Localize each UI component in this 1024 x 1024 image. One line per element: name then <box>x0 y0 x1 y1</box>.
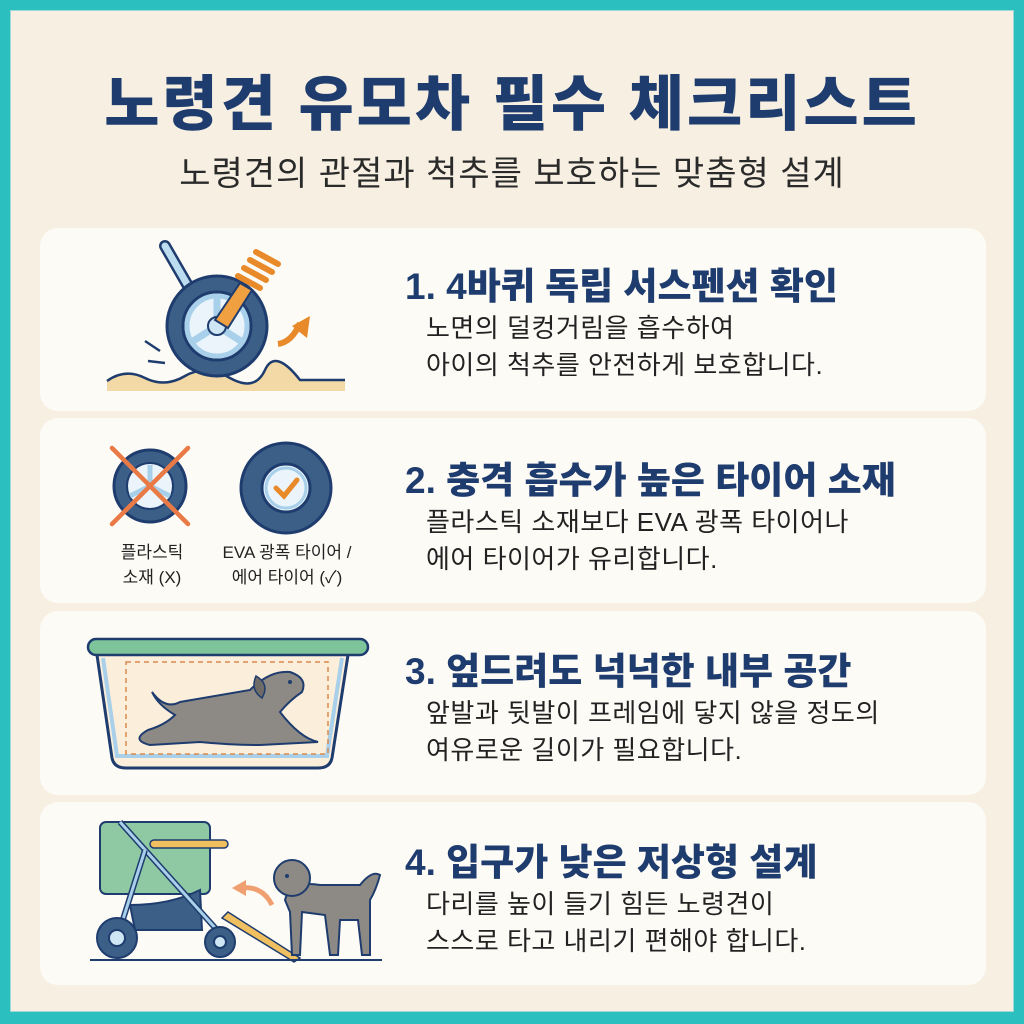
body 4: 스스로 타고 내리기 편해야 합니다. <box>426 926 806 956</box>
icon: EVA tire check <box>240 442 332 534</box>
label plastic <box>121 543 183 587</box>
panel: suspension <box>40 228 986 411</box>
icon: stroller with ramp and dog <box>90 820 382 963</box>
title: 노령견 유모차 필수 체크리스트 <box>104 71 920 138</box>
body 4 <box>426 889 806 956</box>
heading 3: 3. 엎드려도 넉넉한 내부 공간 <box>405 651 851 692</box>
label EVA <box>223 543 352 587</box>
body 3 <box>426 698 880 765</box>
body 1: 노면의 덜컹거림을 흡수하여 <box>426 313 734 343</box>
panel: interior space <box>40 611 986 795</box>
body 1: 아이의 척추를 안전하게 보호합니다. <box>426 350 823 380</box>
heading 1: 1. 4바퀴 독립 서스펜션 확인 <box>405 266 838 307</box>
heading 2: 2. 충격 흡수가 높은 타이어 소재 <box>405 460 896 501</box>
body 2: 플라스틱 소재보다 EVA 광폭 타이어나 <box>426 507 849 537</box>
heading 4: 4. 입구가 낮은 저상형 설계 <box>405 842 817 883</box>
panel: tires <box>40 418 986 603</box>
label plastic: 플라스틱 <box>121 543 183 562</box>
body 4: 다리를 높이 들기 힘든 노령견이 <box>426 889 774 919</box>
panel: low entrance <box>40 802 986 985</box>
icon: wheel with suspension <box>106 240 345 391</box>
icon: basket with lying dog <box>86 638 370 770</box>
label plastic: 소재 (X) <box>123 568 181 587</box>
icon: plastic wheel crossed <box>110 446 190 526</box>
body 3: 여유로운 길이가 필요합니다. <box>426 735 742 765</box>
label EVA: 에어 타이어 (✓) <box>232 568 342 587</box>
body 3: 앞발과 뒷발이 프레임에 닿지 않을 정도의 <box>426 698 880 728</box>
body 2: 에어 타이어가 유리합니다. <box>426 544 718 574</box>
label EVA: EVA 광폭 타이어 / <box>223 543 351 562</box>
subtitle: 노령견의 관절과 척추를 보호하는 맞춤형 설계 <box>179 155 845 193</box>
body 1 <box>426 313 823 380</box>
body 2 <box>426 507 849 574</box>
